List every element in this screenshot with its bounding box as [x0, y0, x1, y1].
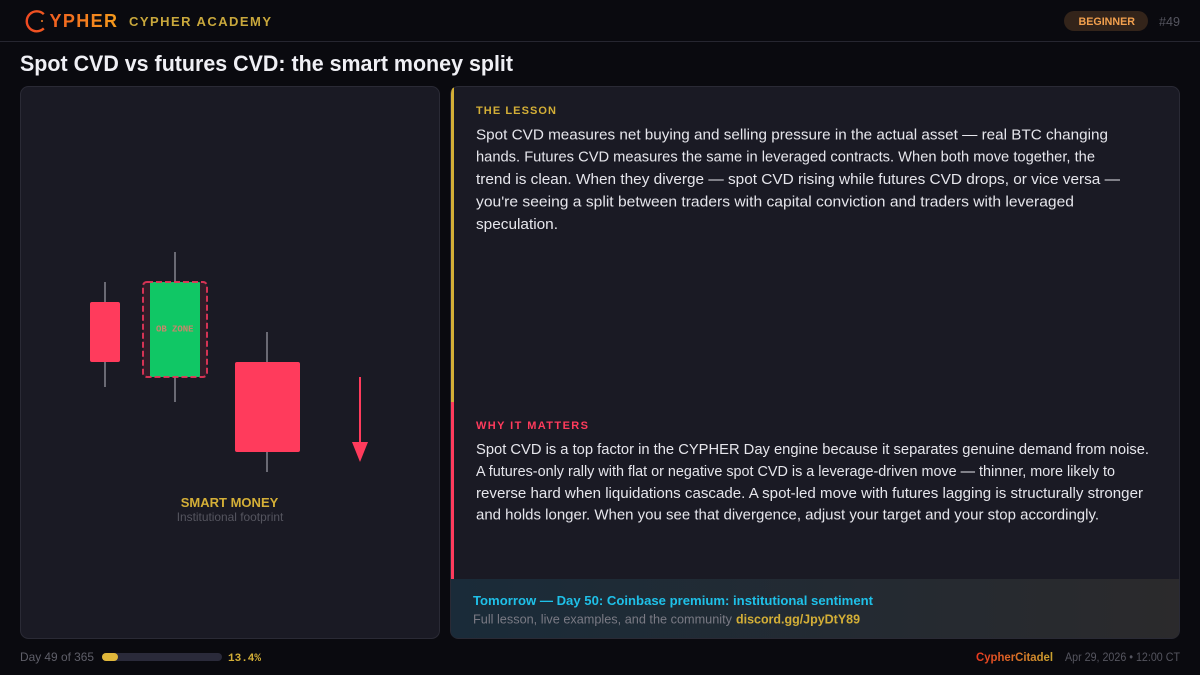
lesson heading: THE LESSON [476, 105, 556, 117]
diagram caption: Institutional footprint [177, 510, 284, 524]
candle: large bearish [235, 332, 300, 472]
diagram caption [177, 495, 284, 524]
badge: beginner: BEGINNER [1078, 16, 1135, 28]
order block zone: OB ZONE [156, 324, 194, 334]
lesson text: hands. Futures CVD measures the same in leveraged contracts. When both move together, the [476, 148, 1095, 166]
footer: progress [20, 650, 261, 665]
day counter: Day 49 of 365 [20, 650, 94, 664]
community line: Full lesson, live examples, and the community [473, 612, 732, 626]
community line: discord.gg/JpyDtY89 [736, 612, 860, 626]
callout: tomorrow [451, 579, 1179, 638]
why heading: WHY IT MATTERS [476, 420, 588, 432]
tomorrow headline: Tomorrow — Day 50: Coinbase premium: institutional sentiment [473, 593, 874, 608]
accent bar: red [451, 402, 454, 579]
lesson text [476, 126, 1120, 233]
lesson text: trend is clean. When they diverge — spot CVD rising while futures CVD drops, or vice versa — [476, 171, 1120, 188]
progress bar [102, 653, 222, 661]
why text [476, 441, 1149, 524]
lesson text: speculation. [476, 216, 558, 233]
diagram caption: SMART MONEY [181, 495, 279, 510]
academy label: CYPHER ACADEMY [129, 14, 271, 29]
accent bar: gold [451, 88, 454, 402]
candle: bullish order block [143, 252, 207, 402]
section: the lesson [451, 88, 1120, 402]
progress percent: 13.4% [228, 653, 261, 665]
arrow: down [352, 377, 368, 462]
panel: lesson content [450, 86, 1180, 638]
lesson text: Spot CVD measures net buying and selling pressure in the actual asset — real BTC changing [476, 126, 1108, 144]
why text: A futures-only rally with flat or negative spot CVD is a leverage-driven move — thinner, more likely to [476, 463, 1115, 480]
section: why it matters [451, 402, 1149, 579]
lesson text: you're seeing a split between traders with capital conviction and traders with leveraged [476, 194, 1074, 210]
why text: and holds longer. When you see that divergence, adjust your target and your stop accordingly. [476, 506, 1099, 524]
header: level badge and lesson number [1064, 11, 1180, 31]
lesson number: #49 [1159, 14, 1180, 29]
why text: Spot CVD is a top factor in the CYPHER Day engine because it separates genuine demand from noise. [476, 441, 1149, 458]
header: brand [27, 11, 271, 31]
icon: cypher logo C [27, 11, 44, 31]
logo wordmark: YPHER [50, 11, 117, 31]
author: CypherCitadel [976, 652, 1053, 664]
community line [473, 612, 860, 626]
why text: reverse hard when liquidations cascade. A spot-led move with futures lagging is structurally stronger [476, 485, 1143, 502]
title: Spot CVD vs futures CVD: the smart money split [20, 51, 514, 76]
candle: small bearish [90, 282, 120, 387]
date: Apr 29, 2026 • 12:00 CT [1065, 652, 1180, 664]
panel: candlestick diagram [20, 86, 440, 638]
order block zone [143, 282, 207, 377]
footer: author and date [976, 652, 1180, 664]
